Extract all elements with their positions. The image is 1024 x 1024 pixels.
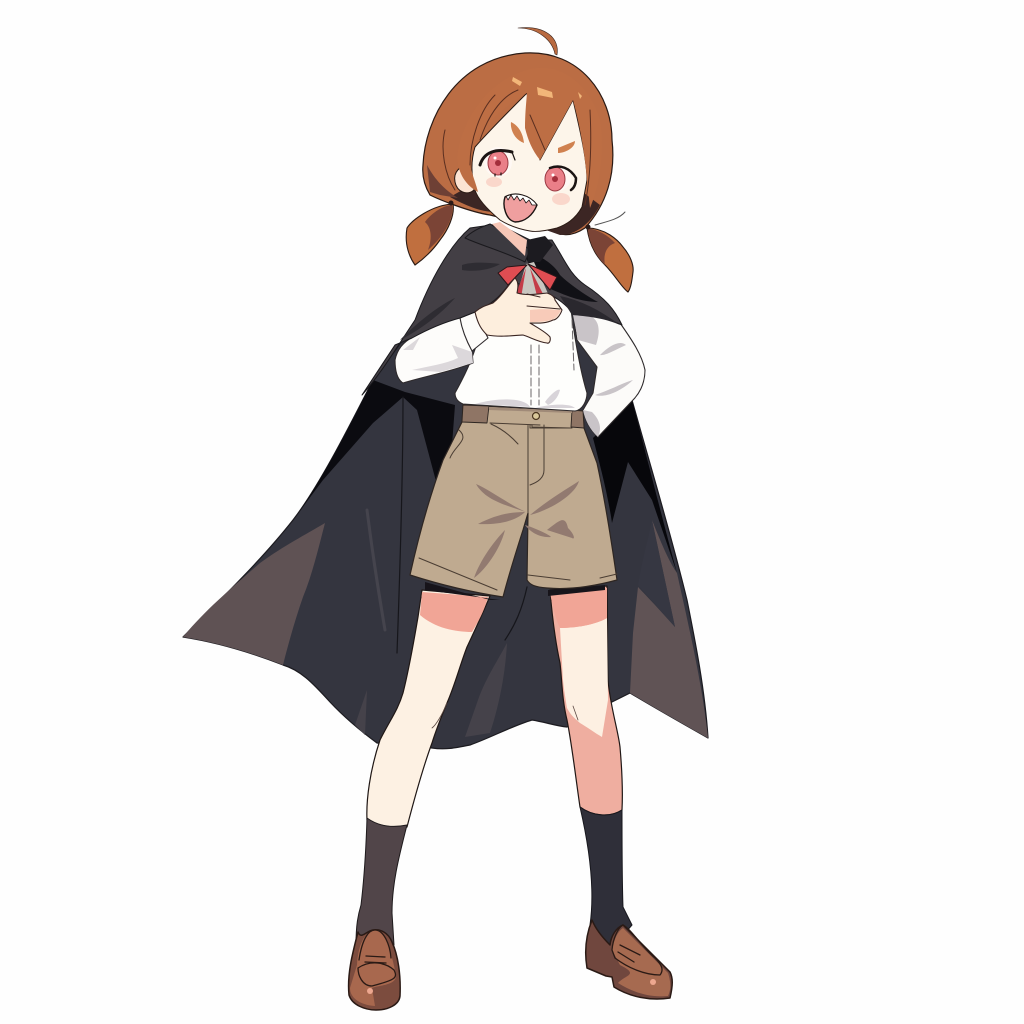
right eye bbox=[543, 165, 571, 191]
hood collar bbox=[465, 224, 530, 262]
ahoge bbox=[518, 28, 557, 55]
cape front bbox=[362, 222, 622, 395]
button bbox=[532, 412, 540, 420]
blush bbox=[486, 177, 502, 187]
cape lit panel right bbox=[630, 520, 708, 738]
cape folds bbox=[638, 520, 675, 627]
hair bbox=[406, 28, 633, 292]
face bbox=[472, 93, 587, 231]
belt sides bbox=[462, 405, 584, 428]
shadow below shorts bbox=[425, 582, 605, 600]
right leg bbox=[550, 586, 622, 815]
shirt bbox=[395, 290, 645, 437]
cape shadow folds bbox=[520, 246, 598, 302]
ear bbox=[455, 165, 474, 193]
mouth bbox=[504, 194, 537, 222]
deep shadow right bbox=[593, 400, 677, 573]
hair ties bbox=[448, 200, 454, 206]
creases bbox=[474, 481, 579, 578]
torso bbox=[455, 290, 587, 411]
right sleeve bbox=[573, 313, 645, 437]
left eye bbox=[484, 147, 512, 177]
ribbon and shirt collar bbox=[498, 262, 557, 298]
left leg bbox=[367, 590, 490, 827]
right pigtail bbox=[587, 228, 633, 292]
back hair bbox=[423, 53, 613, 235]
seams bbox=[419, 423, 617, 590]
hand bbox=[475, 278, 562, 343]
left pigtail bbox=[406, 204, 453, 265]
right shoe bbox=[586, 920, 672, 999]
left shoe bbox=[349, 930, 400, 1010]
cape lit panel left bbox=[183, 523, 325, 665]
face details bbox=[480, 122, 576, 222]
eyebrows bbox=[511, 122, 575, 153]
socks bbox=[356, 807, 632, 950]
cape back bbox=[183, 262, 708, 749]
shorts bbox=[410, 405, 617, 600]
bangs bbox=[457, 68, 602, 208]
deep shadow left bbox=[293, 380, 455, 520]
left sleeve bbox=[395, 317, 473, 383]
